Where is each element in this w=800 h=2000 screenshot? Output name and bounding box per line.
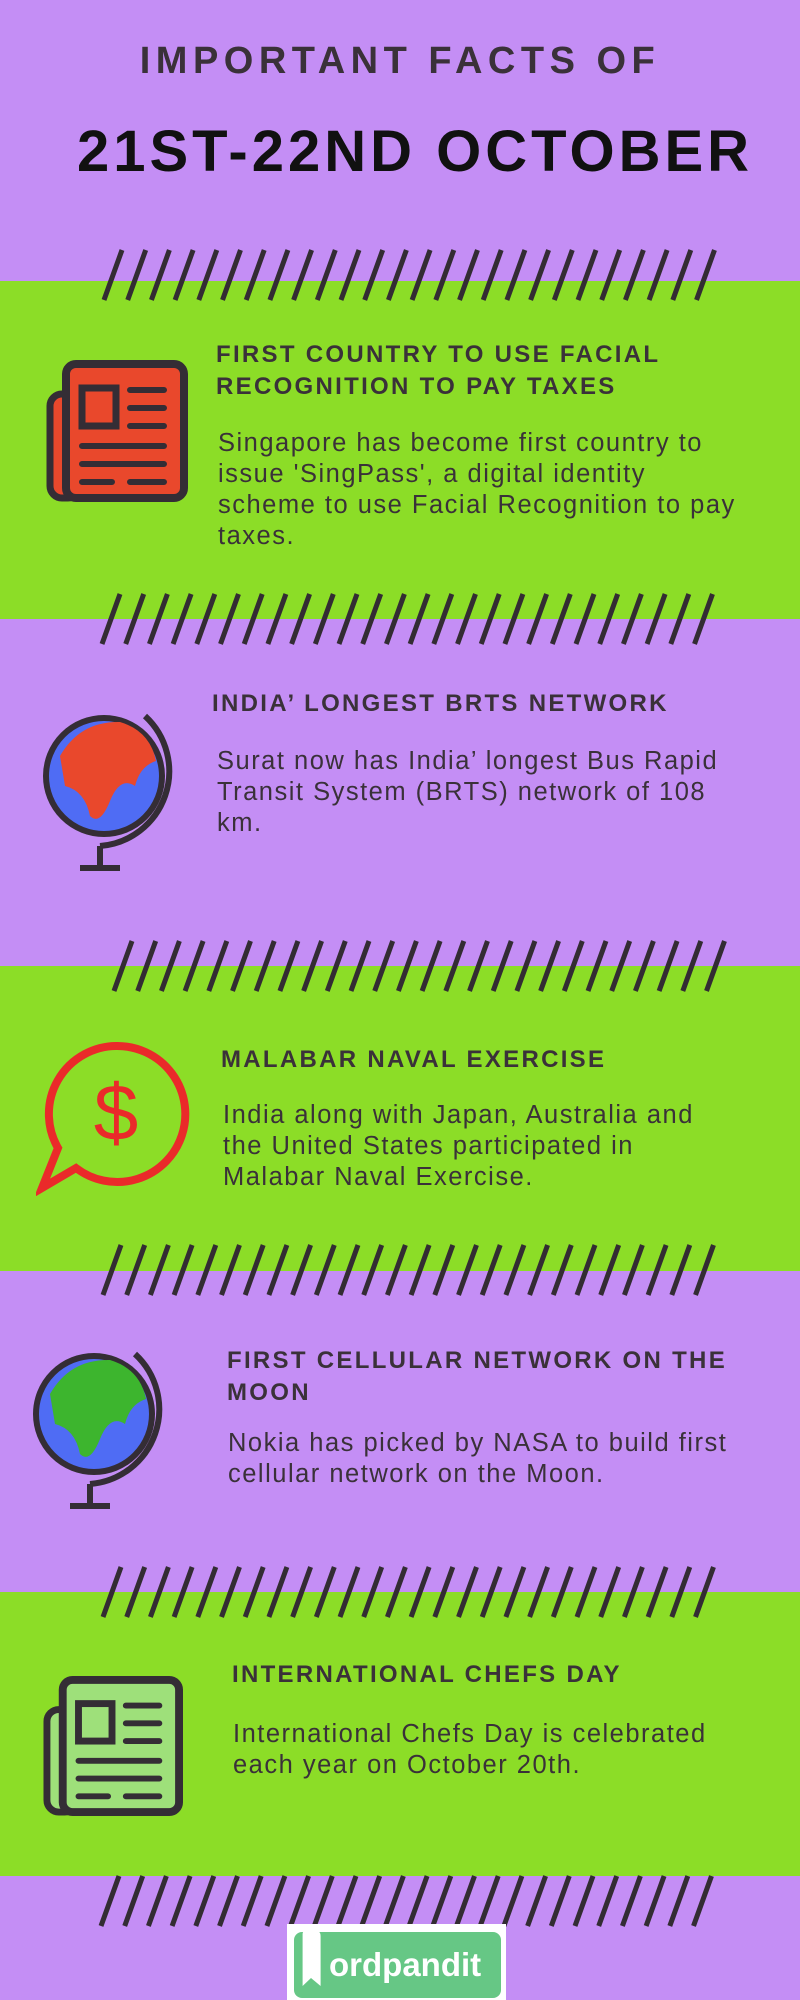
logo: wordpandit: ordpandit xyxy=(329,1946,481,1983)
body 5: International Chefs Day is celebrated xyxy=(233,1720,707,1748)
body 3: Malabar Naval Exercise. xyxy=(223,1163,534,1191)
icon: dollar speech bubble xyxy=(36,1042,190,1196)
body 4: Nokia has picked by NASA to build first xyxy=(228,1429,727,1457)
body 1: Singapore has become first country to xyxy=(218,429,703,457)
green band 3 xyxy=(0,1592,800,1876)
heading 4: MOON xyxy=(227,1379,311,1406)
body 2: Surat now has India’ longest Bus Rapid xyxy=(217,747,718,775)
heading 5: INTERNATIONAL CHEFS DAY xyxy=(232,1661,622,1688)
body 5 xyxy=(233,1720,707,1779)
icon: newspaper red xyxy=(46,360,188,502)
body 1 xyxy=(218,429,736,550)
body 5: each year on October 20th. xyxy=(233,1751,581,1779)
green band 1 xyxy=(0,281,800,619)
heading 4: FIRST CELLULAR NETWORK ON THE xyxy=(227,1347,727,1374)
heading 1: RECOGNITION TO PAY TAXES xyxy=(216,373,617,400)
body 4 xyxy=(228,1429,727,1488)
body 1: taxes. xyxy=(218,522,295,550)
heading 3: MALABAR NAVAL EXERCISE xyxy=(221,1046,606,1073)
heading 4 xyxy=(227,1347,727,1406)
icon: dollar speech bubble: $ xyxy=(94,1068,138,1157)
heading 1: FIRST COUNTRY TO USE FACIAL xyxy=(216,341,660,368)
logo: wordpandit xyxy=(287,1924,506,2000)
body 3: India along with Japan, Australia and xyxy=(223,1101,694,1129)
body 1: issue 'SingPass', a digital identity xyxy=(218,460,646,488)
icon: globe green/blue xyxy=(33,1352,162,1509)
body 3: the United States participated in xyxy=(223,1132,634,1160)
body 2 xyxy=(217,747,718,837)
body 2: Transit System (BRTS) network of 108 xyxy=(217,778,706,806)
icon: globe red/blue xyxy=(43,714,172,871)
heading 1 xyxy=(216,341,660,400)
body 1: scheme to use Facial Recognition to pay xyxy=(218,491,736,519)
green band 2 xyxy=(0,966,800,1271)
body 2: km. xyxy=(217,809,263,837)
title line 1: IMPORTANT FACTS OF xyxy=(140,40,660,82)
heading 2: INDIA’ LONGEST BRTS NETWORK xyxy=(212,690,669,717)
body 4: cellular network on the Moon. xyxy=(228,1460,605,1488)
icon: newspaper green xyxy=(44,1676,183,1816)
title line 2: 21ST-22ND OCTOBER xyxy=(77,119,753,184)
body 3 xyxy=(223,1101,694,1191)
